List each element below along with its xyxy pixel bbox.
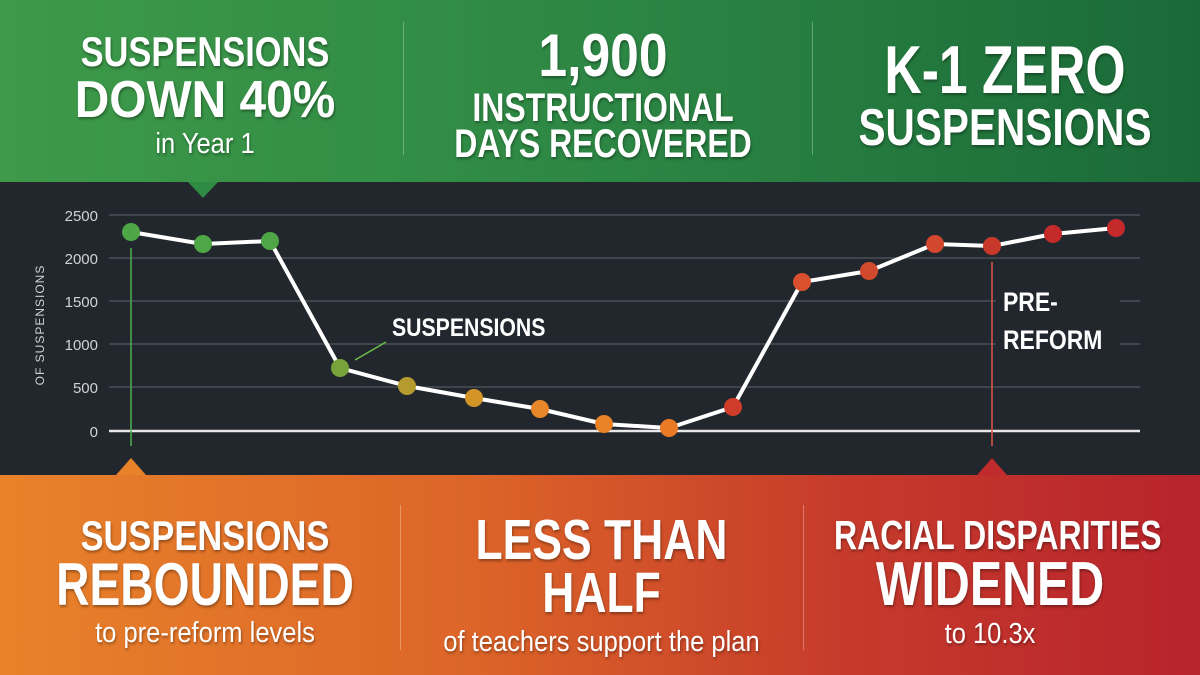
y axis labels: 0	[90, 424, 98, 441]
stat: disparities: to 10.3x	[945, 618, 1035, 650]
callout: pre-reform	[996, 286, 1120, 356]
stat: rebounded: SUSPENSIONS	[81, 512, 329, 559]
y axis labels: 1000	[65, 337, 98, 354]
stat: disparities: WIDENED	[876, 550, 1104, 619]
stat: rebounded	[56, 512, 354, 652]
bottom band	[0, 475, 1200, 675]
stat: K-1 zero: K-1 ZERO	[884, 32, 1126, 108]
stat: 1,900 days: 1,900	[538, 22, 668, 89]
stat: 1,900 days: INSTRUCTIONAL	[472, 86, 734, 130]
stat: disparities	[834, 512, 1162, 650]
stat: 1,900 days	[454, 22, 752, 166]
line chart	[33, 182, 1140, 475]
stat: suspensions down 40%	[75, 28, 336, 160]
stat: K-1 zero	[858, 32, 1152, 157]
stat: 1,900 days: DAYS RECOVERED	[454, 122, 752, 166]
data points	[122, 219, 1125, 437]
callout: suspensions	[355, 313, 545, 360]
marker lines	[130, 248, 132, 446]
y axis labels: 500	[73, 380, 98, 397]
stat: suspensions down 40%: in Year 1	[155, 128, 255, 160]
stat: less than half: HALF	[542, 561, 661, 625]
stat: K-1 zero: SUSPENSIONS	[858, 99, 1152, 157]
stat: less than half: LESS THAN	[476, 508, 727, 572]
y axis labels: 2500	[65, 208, 98, 225]
y axis labels: 1500	[65, 294, 98, 311]
stat: suspensions down 40%: SUSPENSIONS	[81, 28, 329, 75]
stat: disparities: RACIAL DISPARITIES	[834, 512, 1162, 558]
stat: rebounded: REBOUNDED	[56, 551, 354, 618]
stat: less than half: of teachers support the plan	[443, 626, 760, 658]
callout: pre-reform: PRE-	[1003, 287, 1058, 317]
y axis title: OF SUSPENSIONS	[33, 265, 47, 385]
callout: suspensions: SUSPENSIONS	[392, 313, 545, 341]
stat: rebounded: to pre-reform levels	[95, 617, 315, 649]
top band	[0, 0, 1200, 182]
data line	[131, 228, 1116, 428]
stat: less than half	[443, 508, 760, 660]
y axis labels: 2000	[65, 251, 98, 268]
callout: pre-reform: REFORM	[1003, 325, 1102, 355]
triangle markers	[188, 182, 218, 198]
y axis labels	[65, 208, 98, 441]
stat: suspensions down 40%: DOWN 40%	[75, 71, 335, 129]
